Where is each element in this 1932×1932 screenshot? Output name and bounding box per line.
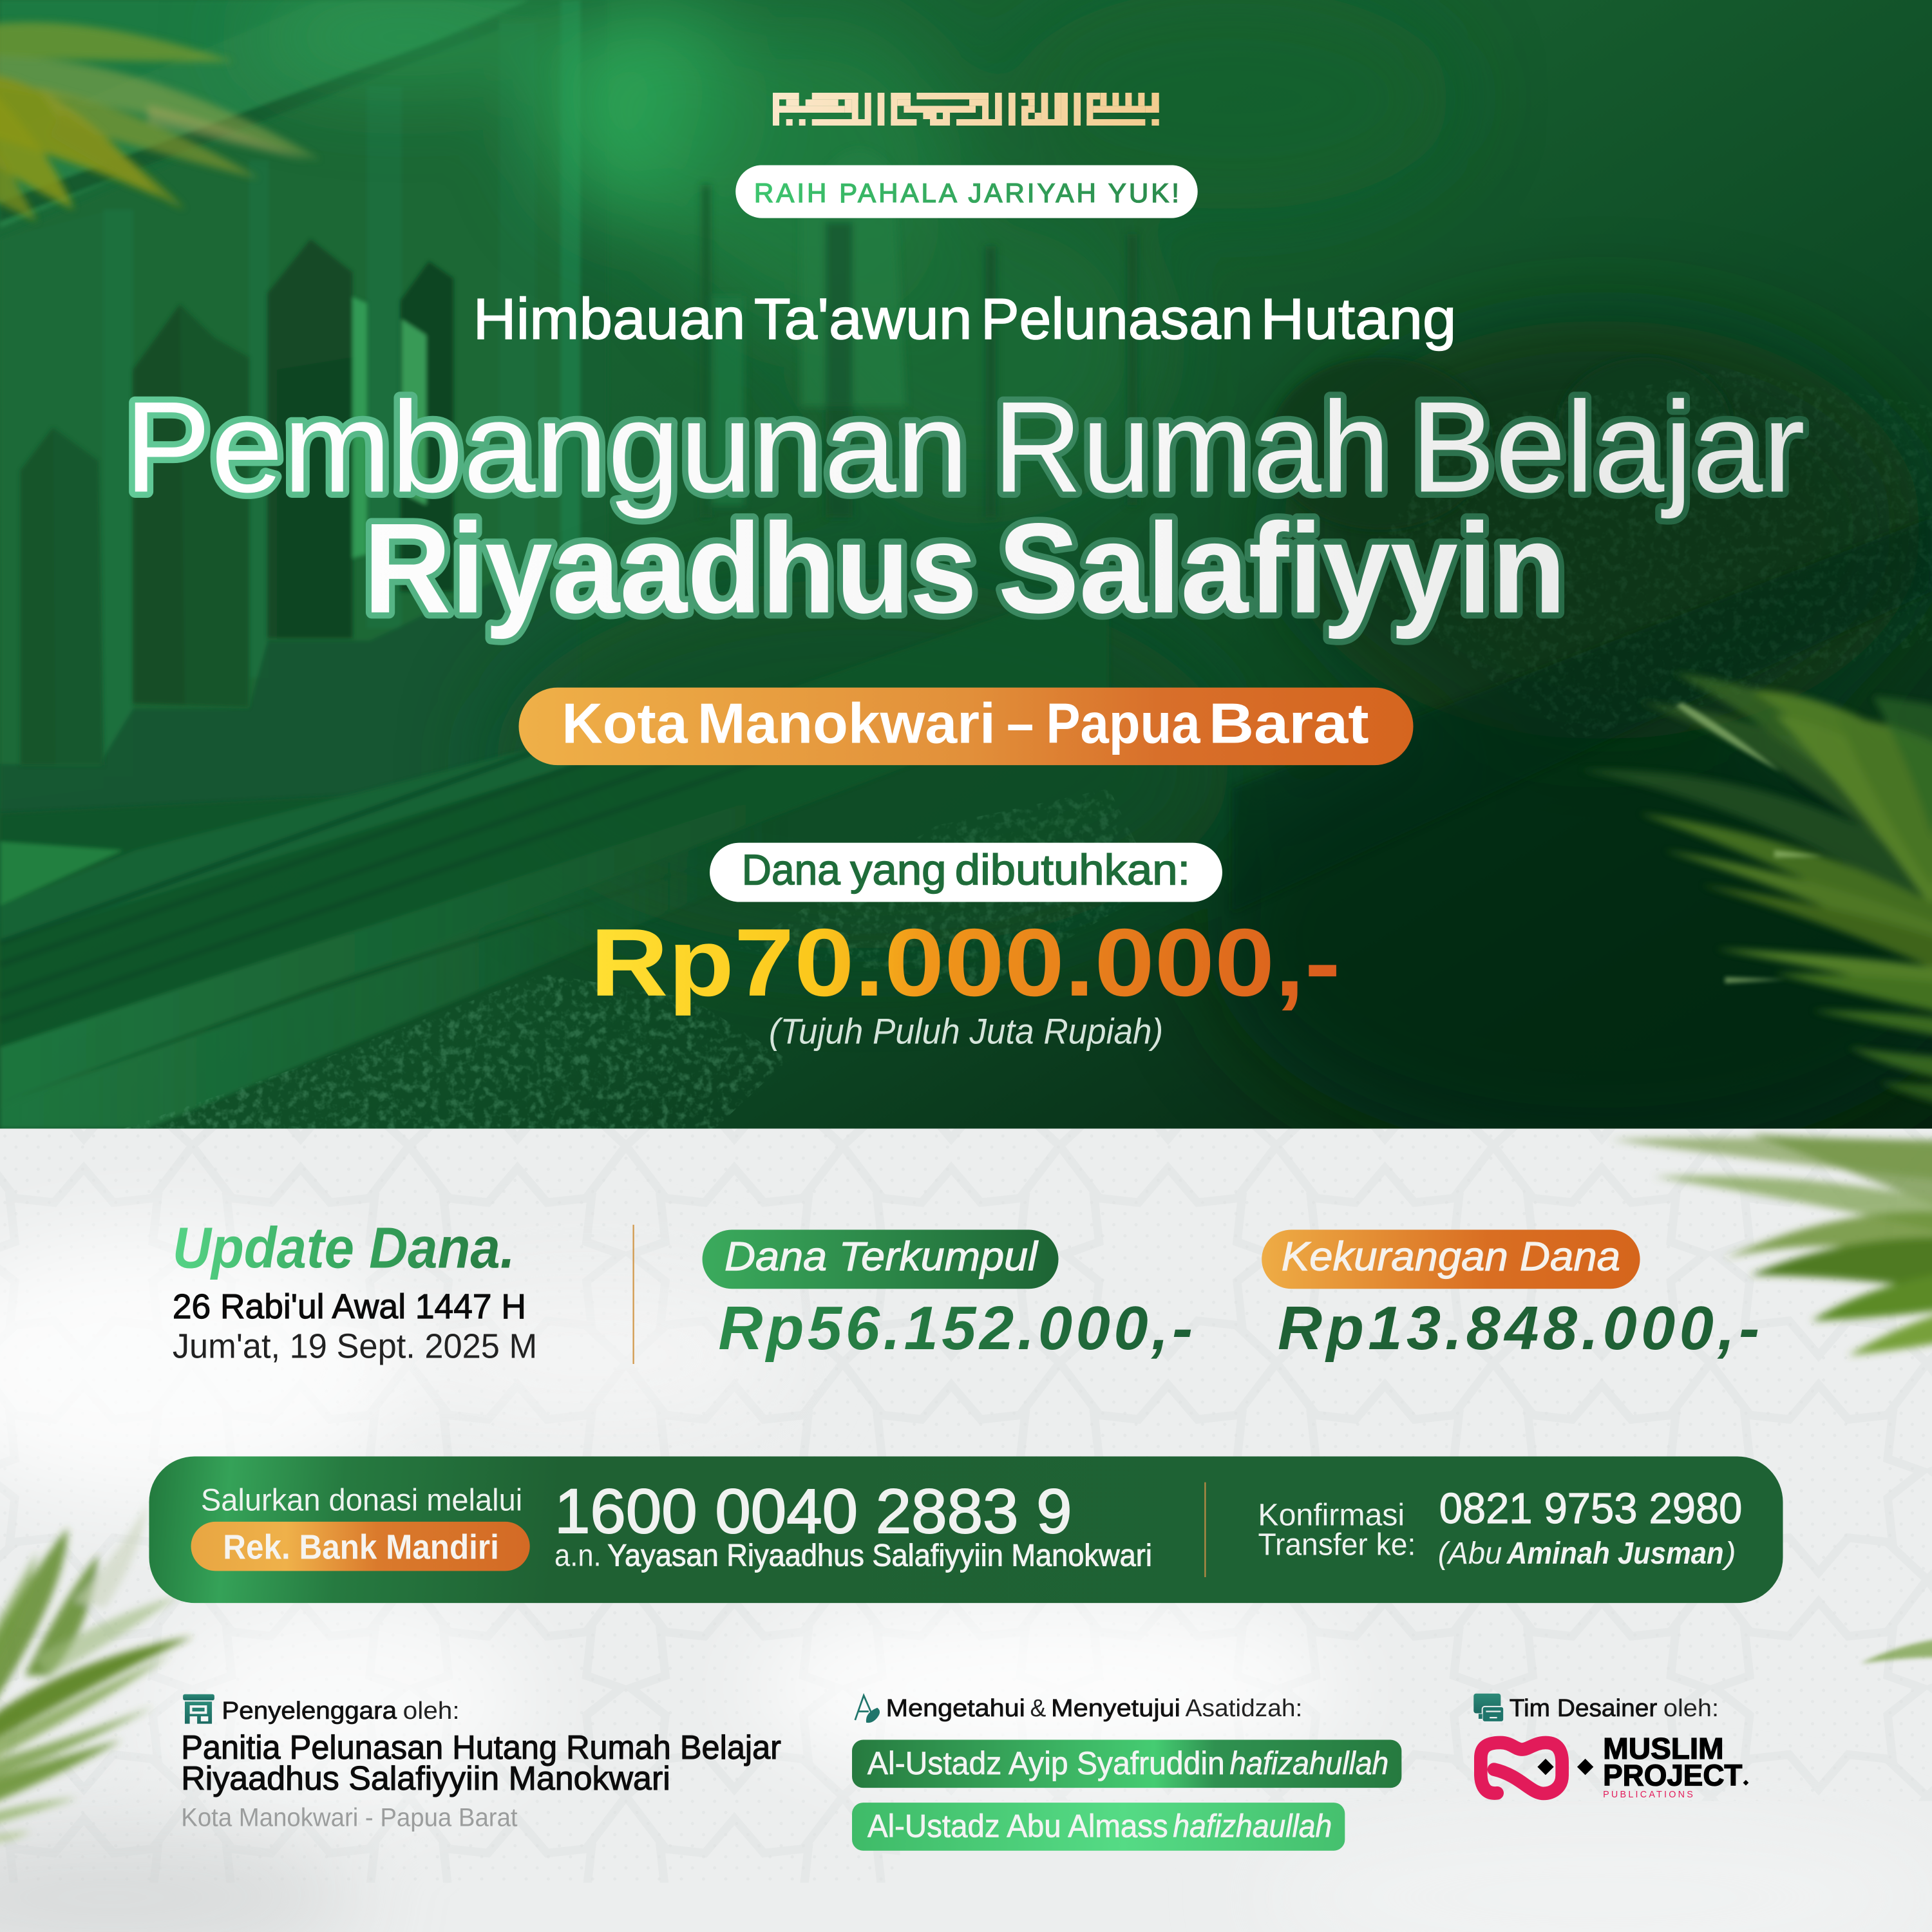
panel: organizer: Riyaadhus Salafiyyiin Manokwari [181,1759,670,1797]
left wall of building [0,0,582,762]
contact name: (Abu [1438,1537,1502,1571]
icon: pen [855,1696,880,1723]
panel: designer credit: Tim Desainer [1510,1694,1658,1722]
divider [632,1225,634,1364]
panel: organizer: Kota Manokwari - Papua Barat [181,1803,518,1832]
location pill: Manokwari [697,692,996,755]
panel: organizer: Penyelenggara [222,1697,397,1725]
ground steps [0,579,1109,1129]
main title: Pembangunan [124,374,969,519]
name pill 2: Al-Ustadz Abu Almass [867,1808,1168,1844]
name pill 2 [852,1803,1345,1851]
small frond right [1861,1639,1932,1663]
subtitle: Himbauan [473,287,746,352]
funds needed pill: yang [850,846,946,895]
phone number: 0821 9753 2980 [1439,1484,1742,1533]
main title [124,374,1805,640]
account number: 1600 0040 2883 9 [554,1476,1072,1546]
subtitle: Hutang [1260,287,1456,352]
main title: Salafiyyin [998,497,1566,640]
palm fronds lower right [1611,1133,1932,1356]
panel: approval: Mengetahui [886,1694,1025,1722]
arch windows [21,239,453,765]
central mosque forms [703,149,1932,912]
confirmation label: Transfer ke: [1258,1528,1416,1562]
subtitle [473,287,1456,352]
palm fronds right [1580,673,1932,1109]
panel: approval: & [1030,1694,1046,1722]
account holder: a.n. [554,1539,601,1573]
contact name: Aminah Jusman [1506,1537,1724,1571]
icon: monitor and keyboard [1473,1694,1504,1722]
panel: kekurangan dana: Rp13.848.000,- [1278,1294,1759,1363]
funds needed pill: dibutuhkan: [955,846,1190,895]
panel: donation banner [149,1456,1783,1603]
logo: muslim project [1481,1732,1748,1800]
lower background with pattern [0,1129,1932,1932]
icon: store [183,1694,214,1724]
location pill: Papua [1046,692,1200,755]
main title: Riyaadhus [363,497,977,640]
tagline pill: RAIH PAHALA JARIYAH YUK! [754,178,1179,208]
panel: dana terkumpul [703,1229,1193,1363]
panel: organizer [181,1694,781,1832]
panel: approval: Asatidzah: [1186,1694,1302,1722]
location pill: Kota [562,692,688,755]
location pill [518,688,1414,765]
panel: approval [852,1694,1401,1851]
palm fronds lower left [0,1503,193,1843]
amount in words: (Tujuh Puluh Juta Rupiah) [769,1012,1163,1052]
palm frond top-left [0,22,320,222]
panel: approval: Menyetujui [1051,1694,1180,1722]
account holder: Yayasan Riyaadhus Salafiyyiin Manokwari [607,1539,1152,1573]
panel: dana terkumpul: Dana Terkumpul [724,1235,1039,1280]
funds needed pill [710,843,1222,902]
main title: Rumah [993,374,1390,519]
funds needed pill: Dana [742,846,841,895]
logo: muslim project: PUBLICATIONS [1603,1790,1693,1800]
name pill 1 [852,1740,1401,1788]
main title: Belajar [1411,374,1805,519]
panel: kekurangan dana [1262,1229,1759,1363]
palm frond highlights [1676,703,1824,983]
contact name: ) [1721,1537,1736,1571]
location pill: Barat [1209,692,1369,755]
name pill 1: Al-Ustadz Ayip Syafruddin [867,1745,1225,1781]
background: green mosque scene [0,0,1932,1158]
name pill 2: hafizhaullah [1173,1808,1332,1844]
bank label: Salurkan donasi melalui [201,1484,522,1518]
panel: update dana: Jum'at, 19 Sept. 2025 M [173,1327,537,1365]
panel: designer credit [1473,1694,1748,1800]
name pill 1: hafizahullah [1229,1745,1388,1781]
logo: muslim project: MUSLIM [1603,1732,1724,1765]
confirmation label [1258,1499,1416,1562]
bank pill: Rek. Bank Mandiri [223,1528,499,1566]
panel: organizer: Panitia Pelunasan Hutang Rumah Belajar [181,1728,781,1766]
subtitle: Pelunasan [981,287,1253,352]
panel: update dana [173,1217,537,1365]
hedges [123,370,1932,1129]
glow light patches [247,0,1932,1158]
subtitle: Ta'awun [754,287,972,352]
tagline pill [735,165,1198,218]
panel: organizer: oleh: [403,1697,460,1725]
panel: dana terkumpul: Rp56.152.000,- [718,1294,1193,1363]
panel: designer credit: oleh: [1663,1694,1719,1722]
panel: update dana: 26 Rabi'ul Awal 1447 H [173,1288,526,1326]
panel: update dana: Update Dana. [173,1217,515,1281]
logo: muslim project: PROJECT [1603,1758,1742,1792]
amount needed: Rp70.000.000,- [590,909,1341,1016]
confirmation label: Konfirmasi [1258,1499,1405,1533]
location pill: – [1007,692,1034,755]
panel: kekurangan dana: Kekurangan Dana [1282,1235,1620,1280]
basmalah calligraphy [773,93,1159,126]
bank pill [191,1522,530,1571]
